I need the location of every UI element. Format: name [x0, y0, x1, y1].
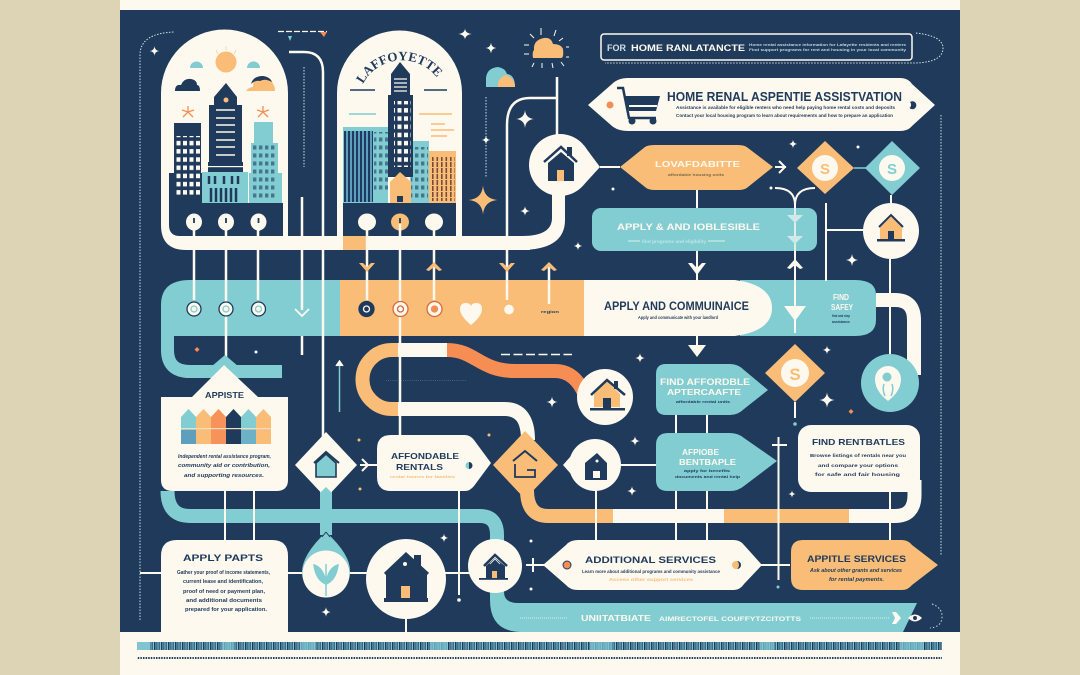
apply arrow: documents and rental help: [675, 474, 741, 479]
orange hexagon: affordable housing units: [668, 172, 725, 177]
orange diamond house: [493, 431, 558, 499]
apply parts card: current lease and identification,: [183, 579, 264, 585]
apply parts card: proof of need or payment plan,: [183, 589, 266, 595]
banner arrow: [892, 612, 901, 624]
find affordable arrow: FIND AFFORDBLE: [660, 377, 750, 387]
apply arrow: apply for benefits: [684, 468, 731, 473]
sparks: [182, 106, 269, 117]
apply parts card: APPLY PAPTS: [183, 553, 263, 563]
band heading: APPLY AND COMMUINAICE: [604, 299, 749, 313]
band side text: SAFEY: [831, 303, 854, 312]
apply arrow: [656, 433, 777, 491]
dollar diamond lower: S: [789, 365, 801, 384]
sun: [216, 46, 236, 72]
affordable rentals card: rental homes for families: [390, 474, 456, 479]
apprtle services card: for rental payments.: [829, 577, 884, 583]
dollar diamonds: S: [820, 161, 830, 178]
band rings: [187, 302, 514, 316]
orange hexagon: [620, 145, 773, 190]
blue building: [343, 127, 388, 203]
find rentables card: Browse listings of rentals near you: [810, 453, 906, 459]
small house circle: [468, 539, 522, 593]
header box: FOR: [607, 43, 626, 53]
additional services card: Learn more about additional programs and community assistance: [582, 569, 720, 574]
dollar diamonds: S: [887, 161, 897, 178]
apply parts card: Gather your proof of income statements,: [177, 570, 271, 576]
band side text: assistance: [832, 319, 851, 324]
apprtle services card: Ask about other grants and services: [809, 568, 902, 574]
additional services card: [543, 540, 762, 590]
arrowheads upper: [359, 262, 557, 272]
find rentables card: [798, 425, 920, 492]
tall tower: [388, 62, 413, 203]
chevron: [295, 309, 309, 316]
central tower: [202, 83, 248, 203]
house column chart: [181, 409, 271, 444]
additional services card: ADDITIONAL SERVICES: [585, 555, 716, 566]
header box: [601, 34, 912, 60]
house diamond: [295, 432, 357, 500]
apply parts card: [161, 540, 288, 632]
teal rectangle: [592, 208, 817, 251]
sign text: Assistance is available for eligible renters who need help paying home rental costs and deposits: [676, 105, 895, 111]
arched title: LAFFOYETTE: [356, 52, 442, 84]
apply arrow: BENTBAPLE: [679, 457, 736, 467]
apprtle services card: APPITLE SERVICES: [807, 554, 906, 565]
main sign: [588, 78, 935, 131]
pin circle: [861, 354, 919, 412]
teal hook: [168, 336, 282, 372]
find affordable arrow: affordable rental units: [676, 399, 731, 404]
droplet plant: [302, 532, 350, 598]
teal rectangle: APPLY & AND IOBLESIBLE: [617, 222, 760, 232]
sun cloud icon: [524, 28, 569, 68]
appiste card: APPISTE: [205, 390, 244, 400]
appiste card: Independent rental assistance program,: [178, 454, 271, 460]
middle band: [161, 280, 876, 372]
teal rectangle: find programs and eligibility: [642, 239, 707, 244]
orange hexagon: LOVAFDABITTE: [655, 159, 740, 169]
bottom barcode strip: [137, 642, 942, 659]
affordable rentals card: AFFONDABLE: [391, 451, 459, 461]
find affordable arrow: APTERCAAFTE: [667, 388, 742, 397]
sign title: HOME RENAL ASPENTIE ASSISTVATION: [667, 90, 902, 104]
find rentables card: FIND RENTBATLES: [812, 437, 905, 447]
apprtle services card: [791, 540, 938, 590]
house node top: [529, 134, 620, 196]
appiste card: community aid or contribution,: [178, 463, 270, 469]
cart icon: [617, 88, 660, 124]
house circle orange roof: [577, 369, 633, 425]
find rentables card: and compare your options: [818, 463, 898, 469]
find rentables card: for safe and fair housing: [815, 472, 900, 478]
header box: Home rental assistance information for Lafayette residents and renters: [749, 42, 907, 47]
top dashes: [278, 30, 327, 32]
affordable rentals card: RENTALS: [396, 462, 443, 472]
find affordable arrow: [656, 364, 768, 415]
eye icon: [908, 614, 922, 622]
dotted frame lines: [140, 32, 943, 620]
dashes: [501, 354, 572, 356]
decorative rules: [349, 90, 454, 136]
up arrow: [336, 361, 343, 412]
sparkle stars and dots: [150, 29, 859, 617]
small cloud: [486, 67, 515, 87]
additional services card: Access other support services: [609, 577, 694, 582]
apply arrow: AFPIOBE: [682, 447, 719, 457]
clouds: [175, 62, 275, 91]
teal and orange buildings: [410, 141, 456, 203]
main cream rail: [280, 190, 565, 250]
band side text: [831, 293, 854, 324]
appiste card: and supporting resources.: [184, 473, 264, 479]
dollar diamond lower: [765, 344, 825, 402]
tiny label: region: [541, 309, 560, 314]
band side text: find and step: [832, 313, 850, 318]
bottom banner: [490, 540, 942, 632]
right arch panel: [337, 30, 462, 236]
rail to pin: [876, 300, 914, 375]
header box: Find support programs for rent and housing in your local community: [749, 47, 907, 52]
left building: [169, 123, 202, 203]
apply parts card: prepared for your application.: [185, 607, 268, 613]
large house circle: [366, 539, 446, 619]
arrows over teal box: [787, 200, 803, 252]
thin connector lines upper: [194, 52, 557, 440]
small dotted text: . . . . . . . . . . . . . . . . . . . . . . . . . . . . . . . . . . . . . .: [386, 377, 466, 382]
dollar diamonds: [797, 141, 920, 195]
right teal building: [249, 122, 282, 203]
header box: HOME RANLATANCTE: [631, 43, 745, 53]
apply parts card: and additional documents: [186, 598, 262, 604]
house circle right: [863, 203, 919, 259]
appiste card: [161, 355, 288, 491]
pins on arches: [186, 214, 443, 231]
orange/cream snake path: [362, 350, 585, 440]
flow arrowheads: [362, 161, 806, 471]
band subtext: Apply and communicate with your landlord: [638, 315, 718, 320]
main sign: Contact your local housing program to learn about requirements and how to prepare an application: [676, 113, 893, 119]
banner text: UNIITATBIATE: [581, 614, 652, 623]
band side text: FIND: [833, 293, 849, 302]
thin connector lines lower: [140, 188, 891, 632]
bottom banner: AIMRECTOFEL COUFFYTZCITOTTS: [659, 616, 802, 623]
affordable rentals card: [377, 435, 491, 491]
left arch panel: [161, 30, 288, 250]
heart: [460, 303, 482, 325]
lower rails: [168, 480, 914, 560]
house circle navy: [563, 439, 621, 491]
